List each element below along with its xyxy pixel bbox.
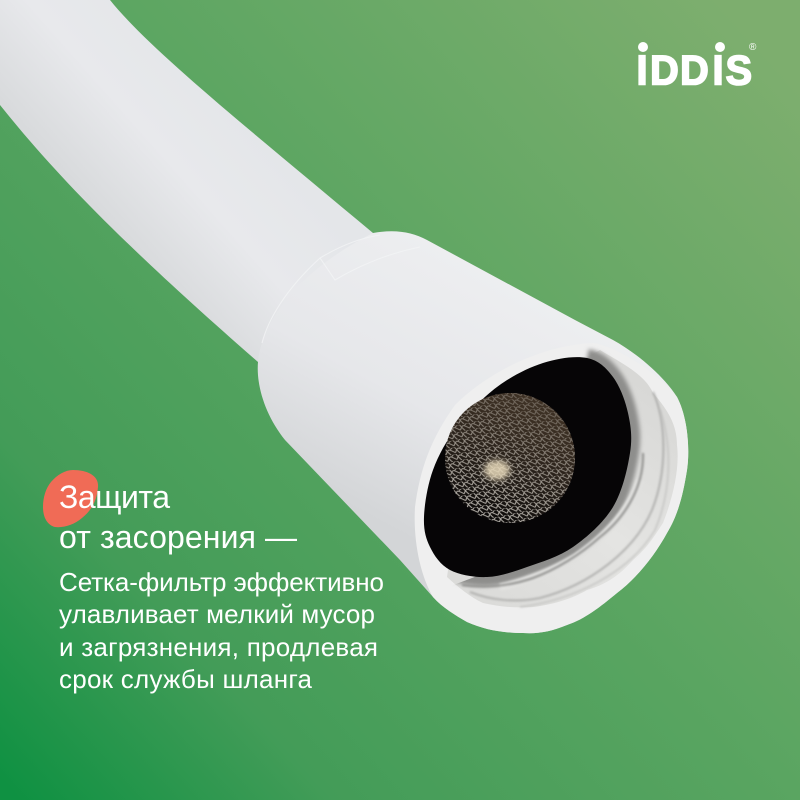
connector rim face [415,343,688,633]
body text [59,567,384,694]
collar seam [262,235,420,343]
white shower hose [0,0,688,633]
inner grey line [462,453,643,586]
outer thread grooves [470,392,663,600]
mesh upper dimming [445,393,575,522]
registered mark: ® [749,42,757,53]
heading: от засорения — [59,519,297,555]
heading: Защита [59,479,170,515]
body text: срок службы шланга [59,664,313,694]
lower pale band [500,480,640,587]
heading [59,479,297,555]
black opening [424,357,631,577]
body text: и загрязнения, продлевая [59,632,378,662]
coral accent blob [43,470,98,527]
logo i dots [638,42,725,52]
body text: Сетка-фильтр эффективно [59,567,384,597]
mesh glint [484,460,510,480]
mesh backing [445,393,575,520]
filter mesh [445,393,575,523]
logo: iddis [637,42,757,94]
body text: улавливает мелкий мусор [59,599,375,629]
threaded inner wall [447,350,678,607]
mesh wires [445,393,575,523]
logo wordmark: IDDIS [637,47,752,94]
grey halo around opening [450,358,631,577]
hose connector body [258,231,688,633]
hose tube [0,0,400,380]
